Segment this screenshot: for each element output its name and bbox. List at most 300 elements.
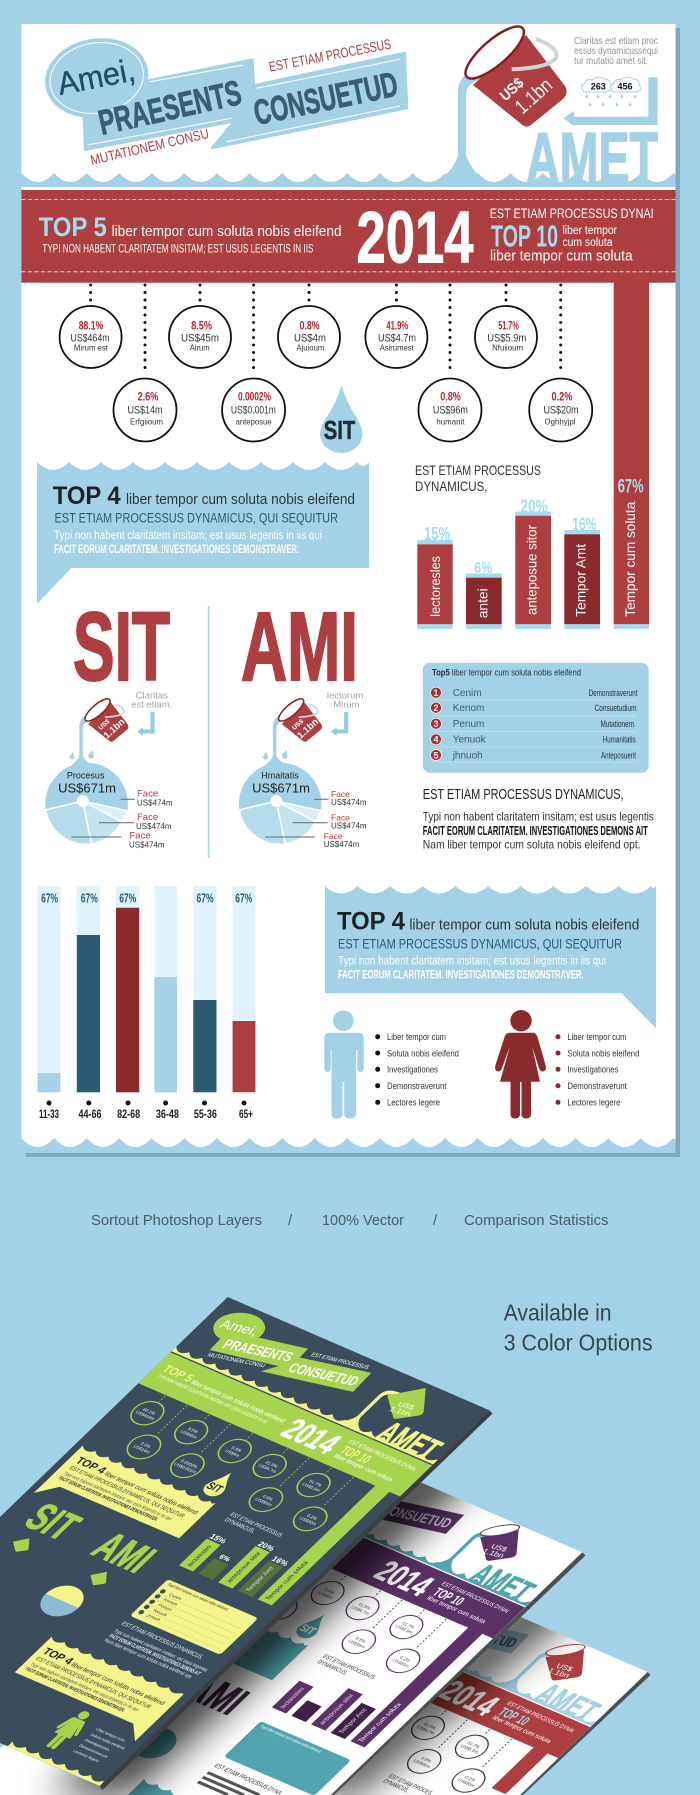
mock banner: liber tempor cum soluta: [332, 1453, 395, 1483]
man list: Soluta nobis eleifend: [387, 1048, 459, 1058]
mock banner: 2014: [273, 1413, 348, 1461]
mock header: Amei,: [216, 1318, 261, 1339]
shadow on red edition: [330, 1616, 582, 1795]
woman list: Lectores legere: [567, 1098, 620, 1108]
mockup: purple edition: 0.8%: [323, 1587, 336, 1595]
mockup: purple edition: Tempor Amt: [337, 1708, 369, 1735]
mockup: red edition: EST ETIAM PROCESSUS DYNAI: [505, 1701, 576, 1734]
mock callout 2: liber tempor cum soluta nobis eleifend: [69, 1662, 166, 1707]
mock text block: EST ETIAM PROCESSUS DYNAMICUS,: [119, 1621, 205, 1661]
intro note: Claritas est etiam proc: [574, 35, 658, 47]
text block: processus: [423, 787, 654, 852]
splash drops: [70, 750, 94, 759]
red banner: liber tempor cum soluta nobis eleifend: [112, 223, 342, 240]
circle 41.9%: Asirumest: [380, 343, 414, 353]
mock callout: Typi non habent claritatem insitam; est usus legentis in iis qui: [62, 1471, 173, 1522]
mock list panel: jhnuoh: [145, 1613, 162, 1622]
callout: top 4 second: [325, 886, 656, 1028]
mock list panel: [130, 1579, 258, 1655]
small stream: [262, 714, 290, 768]
mock banner: [21, 1352, 432, 1610]
mockup: red edition: 2014: [431, 1675, 507, 1723]
small arrow: [331, 712, 348, 736]
bar Tempor cum soluta: 67%: [618, 477, 644, 498]
mockup sheet: purple edition: [0, 1439, 582, 1795]
circle 0.8% humanit: humanit: [436, 416, 465, 426]
mock text block: Nam liber tempor cum soluta nobis eleifend opt.: [102, 1638, 194, 1680]
bar 36-48: [154, 886, 179, 1121]
header wave: [21, 173, 675, 188]
rain clouds: 263: [591, 82, 606, 92]
pie labels: [324, 789, 367, 849]
bar 11-33: 11-33: [39, 1109, 59, 1121]
circle 8.5%: Airum: [190, 343, 210, 353]
circle 2.6%: 2.6%: [138, 392, 158, 404]
bucket illustration: [459, 19, 567, 127]
mock circles: US$14m: [132, 1444, 151, 1454]
note: Mirum: [333, 700, 360, 711]
rain clouds: 456: [617, 82, 633, 92]
circle 0.8%: US$4m: [294, 333, 326, 345]
mockup thickness: dark: [100, 1410, 493, 1790]
mockup: red edition: US$20m: [457, 1778, 476, 1788]
bar 82-68: 67%: [119, 890, 136, 905]
circle 0.2%: 0.2%: [552, 392, 572, 404]
bar 44-66: [77, 886, 102, 1121]
mock circles: US$45m: [179, 1429, 199, 1440]
bar Tempor Amt: 16%: [572, 515, 596, 535]
panel: SIT pour and pie: US$671m: [58, 781, 116, 796]
infographic card: [21, 24, 675, 1153]
mockup: purple edition: liber tempor cum soluta: [425, 1595, 487, 1625]
mock circles: US$96m: [254, 1497, 273, 1507]
small bucket: [276, 696, 322, 742]
mockup: dark green edition: [0, 1299, 487, 1786]
mock headings: SIT: [14, 1496, 90, 1548]
note: [327, 691, 366, 711]
note: est etiam.: [131, 700, 172, 711]
bar lectoresles: 15%: [424, 524, 450, 544]
mockup: purple edition: TOP 10: [429, 1586, 468, 1609]
list row 5: 5: [433, 750, 439, 760]
mock circles: US$464m: [134, 1410, 156, 1421]
circle 0.0002%: [222, 378, 285, 442]
mock header: MUTATIONEM CONSU: [206, 1352, 267, 1369]
list row 1: 1: [433, 688, 439, 698]
mock list panel: Yenuok: [152, 1608, 169, 1618]
mockup: red edition: TOP 10: [494, 1705, 533, 1729]
mock woman list: Investigationes: [84, 1738, 111, 1752]
mock headings: AMI: [82, 1525, 165, 1581]
mock circles: 41.9%: [264, 1460, 279, 1469]
small stream: [68, 714, 96, 768]
mockup: purple edition: 1.1bn: [480, 1547, 506, 1560]
heading word 1: PRAESENTS: [95, 73, 245, 143]
callout: top 4: TOP 4: [53, 482, 121, 510]
mock circles: 88.1%: [142, 1407, 157, 1416]
year: 2014: [356, 198, 474, 278]
bar 11-33: [38, 886, 60, 1121]
circle 88.1%: US$464m: [70, 333, 110, 345]
mock header: AMET: [369, 1415, 450, 1465]
mock callout 2: Typi non habent claritatem insitam; est usus legentis in iis qui: [28, 1662, 140, 1713]
mockup sheet: dark green edition: [0, 1297, 489, 1786]
circle 0.8%: Ajuioum: [296, 343, 324, 353]
woman list: Liber tempor cum: [567, 1032, 626, 1042]
circle 0.2%: [529, 378, 592, 442]
pie labels: US$474m: [136, 822, 172, 831]
circle 88.1%: 88.1%: [79, 320, 103, 332]
pie values: Procesus: [67, 770, 105, 780]
age bar chart: [38, 886, 255, 1121]
circle 8.5%: US$45m: [181, 333, 219, 345]
small bucket: 1.1bn: [295, 716, 321, 741]
mock circles: US$4m: [224, 1449, 241, 1458]
mock pie: [0, 1534, 114, 1622]
mockup: red edition: US$: [554, 1662, 575, 1673]
man list: Lectores legere: [387, 1098, 440, 1108]
bar 44-66: 44-66: [78, 1109, 102, 1121]
divider: [208, 606, 209, 858]
panel: top5 list: [423, 663, 649, 773]
small arrow: [137, 712, 155, 736]
bar 82-68: 82-68: [117, 1109, 141, 1121]
mockup: purple edition: EST ETIAM PROCESSUS DYNAI: [439, 1581, 510, 1614]
pie chart: [239, 763, 321, 844]
colour options heading: [504, 1300, 653, 1356]
mockup: purple edition: US$4.7m: [350, 1605, 371, 1616]
bar 55-36: [193, 886, 217, 1121]
mockup: red edition: US$5.9m: [459, 1744, 480, 1754]
mockup: purple edition: US$: [489, 1542, 510, 1554]
mock woman list: Liber tempor cum: [95, 1727, 127, 1743]
panel: SIT pour and pie: [45, 691, 173, 850]
pie labels: Face: [137, 812, 158, 823]
mockup: red edition: liber tempor cum soluta: [490, 1715, 553, 1745]
mock callout 2: TOP 4: [39, 1647, 76, 1667]
list row 4: [430, 734, 636, 746]
heading word 2: CONSUETUD: [250, 65, 401, 133]
circle 0.8%: 0.8%: [300, 320, 320, 332]
mockup: red edition: US$4.7m: [415, 1725, 436, 1736]
mock banner: EST ETIAM PROCESSUS DYNAI: [347, 1439, 418, 1472]
panel: top5 list: Top5 liber tempor cum soluta nobis eleifend: [432, 668, 581, 679]
mock callout: [34, 1446, 216, 1550]
woman figure: [495, 1010, 546, 1118]
list row 5: jhnuoh: [452, 750, 483, 761]
mock bottom wave: [8, 1741, 105, 1786]
text block: processus: Nam liber tempor cum soluta nobis eleifend opt.: [423, 838, 641, 852]
arrow: [563, 77, 658, 126]
list row 2: 2: [433, 703, 439, 713]
bar chart title: [415, 462, 541, 494]
mockup: purple edition: anteposue sitor: [318, 1692, 356, 1726]
mock banner: TOP 5: [159, 1363, 197, 1385]
circle 0.8%: [278, 306, 340, 368]
note: lectorum.: [327, 691, 366, 702]
pie labels: [129, 789, 173, 850]
bucket illustration: US$: [497, 74, 528, 105]
bar 11-33: 67%: [41, 890, 58, 905]
circle 0.2%: US$20m: [544, 404, 578, 416]
mock banner: TOP 10: [336, 1444, 375, 1467]
list row 4: Humanitatis: [603, 735, 636, 745]
circle 41.9%: US$4.7m: [378, 333, 416, 345]
text block: processus: EST ETIAM PROCESSUS DYNAMICUS,: [423, 787, 624, 803]
mockup: purple edition: 41.9%: [357, 1602, 372, 1611]
red banner: liber tempor: [562, 225, 617, 237]
bar 55-36: 67%: [196, 890, 214, 905]
AMI heading: AMI: [241, 592, 358, 701]
circle 41.9%: [365, 306, 427, 368]
mock list panel: Penum: [157, 1603, 174, 1612]
bar anteposue sitor: 20%: [520, 496, 548, 516]
card shadow: [26, 28, 680, 1157]
mockup thickness: purple: [331, 1552, 586, 1795]
callout: top 4 second: EST ETIAM PROCESSUS DYNAMICUS, QUI SEQUITUR: [338, 936, 622, 951]
mock bars: [178, 1512, 323, 1604]
pie labels: Face: [130, 831, 151, 842]
mockup: purple edition: AMET: [462, 1557, 543, 1607]
rain clouds: [582, 77, 641, 106]
feature strip: /: [433, 1212, 438, 1229]
mockup: purple edition: [6, 1437, 584, 1795]
mock bars: Tempor cum soluta: [264, 1560, 310, 1601]
mockup: red edition: 41.9%: [422, 1722, 437, 1730]
text block: processus: Typi non habent claritatem insitam; est usus legentis: [423, 810, 654, 824]
list row 2: Kenom: [453, 703, 484, 714]
circle 8.5%: [169, 306, 231, 368]
mockup: purple edition: US$20m: [391, 1658, 411, 1668]
mock bars: 20%: [256, 1540, 277, 1553]
list row 4: Yenuok: [453, 735, 487, 746]
top 5: TOP 5: [39, 212, 107, 242]
list row 3: 3: [433, 719, 439, 729]
woman list: Soluta nobis eleifend: [567, 1048, 639, 1058]
pie labels: US$474m: [331, 798, 367, 807]
mock bars: 15%: [207, 1533, 229, 1546]
mockup: purple edition: Tempor cum soluta: [357, 1702, 403, 1743]
mock header: CONSUETUD: [285, 1360, 362, 1389]
mock circles: US$20m: [298, 1516, 318, 1526]
mock callout: EST ETIAM PROCESSUS DYNAMICUS, QUI SEQUITUR: [67, 1465, 186, 1519]
mock bars: Tempor Amt: [245, 1566, 276, 1593]
mock bars: 6%: [217, 1553, 233, 1563]
bar 55-36: 55-36: [194, 1109, 217, 1121]
mockup: purple edition: SIT: [296, 1621, 320, 1637]
mockup sheet: red edition: [141, 1559, 648, 1795]
mock circles: 0.0002%: [179, 1459, 199, 1469]
mockup: purple edition: CONSUETUD: [378, 1502, 455, 1531]
red banner: TYPI NON HABENT CLARITATEM INSITAM; EST USUS LEGENTIS IN IIS: [42, 244, 314, 256]
bar 65+: 65+: [239, 1109, 253, 1121]
small bucket: 1.1bn: [102, 716, 127, 741]
mock header: [168, 1299, 487, 1468]
feature strip: 100% Vector: [322, 1212, 404, 1229]
SIT heading: SIT: [73, 592, 170, 701]
mock circles: US$5.9m: [301, 1482, 322, 1493]
mockup: purple edition: 0.2%: [399, 1655, 411, 1663]
list row 5: [430, 750, 636, 761]
pie labels: US$474m: [129, 840, 165, 850]
mockup: red edition: 0.8%: [420, 1756, 433, 1763]
red banner: liber tempor cum soluta: [490, 249, 633, 265]
mockup: purple edition: US$4m: [317, 1591, 334, 1600]
mockup: red edition: 51.7%: [466, 1741, 481, 1749]
bar chart: [417, 282, 649, 629]
mock circles: 2.6%: [139, 1441, 152, 1449]
mock circles: US$4.7m: [257, 1463, 278, 1474]
callout: top 4: Typi non habent claritatem insitam; est usus legentis in iis qui: [54, 530, 322, 542]
feature strip: Sortout Photoshop Layers: [91, 1212, 262, 1229]
mock bars: lectoresles: [186, 1545, 213, 1568]
circle 0.8% humanit: US$96m: [433, 404, 468, 416]
circle 0.0002%: anteposue: [236, 416, 272, 426]
mock circles: 0.8%: [261, 1494, 274, 1502]
mock banner: TYPI NON HABENT CLARITATEM INSITAM; EST USUS LEGENTIS IN IIS: [156, 1374, 269, 1425]
mock callout 2: [3, 1637, 184, 1741]
list row 3: [430, 718, 634, 730]
splash drops: [263, 750, 287, 759]
mock text block: FACIT EORUM CLARITATEM. INVESTIGATIONES DEMONS AIT: [107, 1634, 202, 1677]
mockup: purple edition: US$45m: [272, 1571, 292, 1582]
small bucket: US$: [291, 718, 305, 732]
panel: AMI pour and pie: [239, 691, 367, 849]
mock header: EST ETIAM PROCESSUS: [310, 1352, 370, 1371]
circle 8.5%: 8.5%: [191, 320, 212, 332]
list row 3: Mutationem: [600, 719, 634, 729]
mock callout 2: EST ETIAM PROCESSUS DYNAMICUS, QUI SEQUITUR: [34, 1656, 153, 1710]
mockup: purple edition: EST ETIAM PROCESSUS: [321, 1654, 377, 1681]
mockup: purple edition: US$96m: [347, 1639, 366, 1649]
circle 2.6%: US$14m: [128, 404, 162, 416]
pie labels: US$474m: [331, 821, 367, 830]
list row 1: Cenim: [453, 688, 482, 699]
mock drop: [199, 1469, 240, 1499]
mockup: purple edition: 8.5%: [279, 1569, 292, 1576]
red banner: [21, 190, 675, 283]
circle 0.0002%: US$0.001m: [231, 404, 276, 416]
circle 51.7%: US$5.9m: [487, 333, 526, 345]
mockup: red edition: CONSUETUD: [443, 1622, 521, 1651]
pie labels: Face: [331, 813, 350, 823]
mock callout: TOP 4: [72, 1456, 109, 1476]
mock list panel: Kenom: [162, 1597, 179, 1607]
circle 0.8% humanit: 0.8%: [440, 392, 461, 404]
circle 51.7%: 51.7%: [498, 320, 519, 332]
mockup: red edition: US$45m: [337, 1691, 357, 1701]
circle 51.7%: [475, 306, 537, 368]
mock callout: FACIT EORUM CLARITATEM. INVESTIGATIONES DEMONSTRAVER.: [57, 1476, 159, 1523]
mock drop: SIT: [203, 1479, 227, 1495]
pie values: Hmaitatis: [261, 770, 299, 780]
mock woman list: [72, 1727, 133, 1767]
feature strip: [91, 1212, 608, 1229]
SIT water drop: SIT: [324, 415, 355, 445]
mockup: purple edition: 0.8%: [354, 1636, 367, 1644]
SIT water drop: [320, 385, 362, 453]
callout: top 4: [37, 462, 369, 604]
mockup: purple edition: Top5 liber tempor cum soluta nobis eleifend: [259, 1724, 323, 1754]
mockup: red edition: 1.1bn: [546, 1667, 572, 1680]
mock circles: 51.7%: [308, 1479, 323, 1488]
small bucket: US$: [97, 718, 112, 732]
callout: top 4: EST ETIAM PROCESSUS DYNAMICUS, QUI SEQUITUR: [54, 511, 338, 526]
woman list: Demonstraverunt: [567, 1081, 627, 1091]
mockup: red edition: US$4m: [382, 1710, 399, 1720]
mockup: purple edition: lectoresles: [279, 1687, 306, 1710]
mock circles: US$0.001m: [173, 1462, 198, 1474]
speech bubble: [39, 30, 155, 126]
pie labels: Face: [137, 789, 158, 800]
feature strip: /: [288, 1212, 293, 1229]
list row 5: Anteposuerit: [601, 750, 636, 760]
bar 82-68: [116, 886, 141, 1121]
note: [131, 691, 172, 711]
pie labels: Face: [331, 789, 350, 799]
list row 4: 4: [433, 735, 439, 745]
callout: top 4: FACIT EORUM CLARITATEM. INVESTIGATIONES DEMONSTRAVER.: [54, 542, 299, 556]
mock text block: Typi non habent claritatem insitam; est usus legentis: [112, 1629, 209, 1673]
pie labels: US$474m: [137, 799, 173, 808]
red banner: TOP 10: [491, 218, 558, 254]
mockup: red edition: 0.8%: [388, 1707, 401, 1715]
circle 51.7%: Nfuiioum: [492, 343, 523, 353]
list row 2: Consuetudium: [594, 703, 636, 713]
colour options heading: 3 Color Options: [504, 1330, 653, 1356]
bar 36-48: 36-48: [156, 1109, 179, 1121]
red tagline bottom: MUTATIONEM CONSU: [89, 125, 210, 168]
mock header: PRAESENTS: [219, 1337, 297, 1365]
bar antei: 6%: [474, 560, 492, 577]
bar anteposue sitor: [515, 496, 551, 629]
circle 0.8% humanit: [418, 378, 482, 442]
circle 88.1%: Mirum est: [74, 343, 108, 353]
mock header: US$: [396, 1400, 417, 1412]
feature strip: Comparison Statistics: [464, 1212, 608, 1229]
circle 2.6%: Erfgiioum: [130, 416, 163, 426]
mock circles: 8.5%: [187, 1427, 199, 1434]
pie labels: Face: [324, 831, 343, 841]
circle 88.1%: [60, 306, 122, 368]
mockup thickness: red: [520, 1672, 650, 1795]
bar Tempor cum soluta: [614, 282, 649, 629]
mockup: purple edition: US$5.9m: [394, 1624, 414, 1635]
mockup: purple edition: DYNAMICUS,: [315, 1659, 350, 1677]
woman list: [556, 1032, 639, 1108]
mock header: 1.1bn: [388, 1405, 414, 1418]
mock list panel: Cenim: [168, 1592, 183, 1601]
top 10: EST ETIAM PROCESSUS DYNAI: [490, 205, 654, 221]
mock list panel: Top5 liber tempor cum soluta nobis eleifend: [166, 1582, 230, 1612]
mock banner: liber tempor cum soluta nobis eleifend: [189, 1380, 287, 1425]
callout: top 4 second: TOP 4: [337, 907, 405, 935]
mock woman list: Lectores legere: [72, 1749, 101, 1763]
callout: top 4 second: Typi non habent claritatem insitam; est usus legentis in iis qui: [338, 955, 606, 967]
bar antei: [466, 560, 502, 629]
mock bars: 16%: [269, 1555, 291, 1568]
bar Tempor cum soluta: Tempor cum soluta: [622, 502, 638, 617]
mock woman list: Soluta nobis eleifend: [89, 1732, 127, 1751]
man list: Liber tempor cum: [387, 1032, 446, 1042]
intro note: essus dynamicussequi: [574, 45, 658, 57]
mockup: red edition: 0.2%: [464, 1775, 477, 1783]
title ribbon group: [39, 30, 407, 168]
bar 65+: [233, 886, 255, 1121]
mock woman list: Demonstraverunt: [78, 1743, 110, 1759]
list row 1: Demonstraverunt: [588, 688, 638, 698]
mock headings: [14, 1496, 165, 1581]
